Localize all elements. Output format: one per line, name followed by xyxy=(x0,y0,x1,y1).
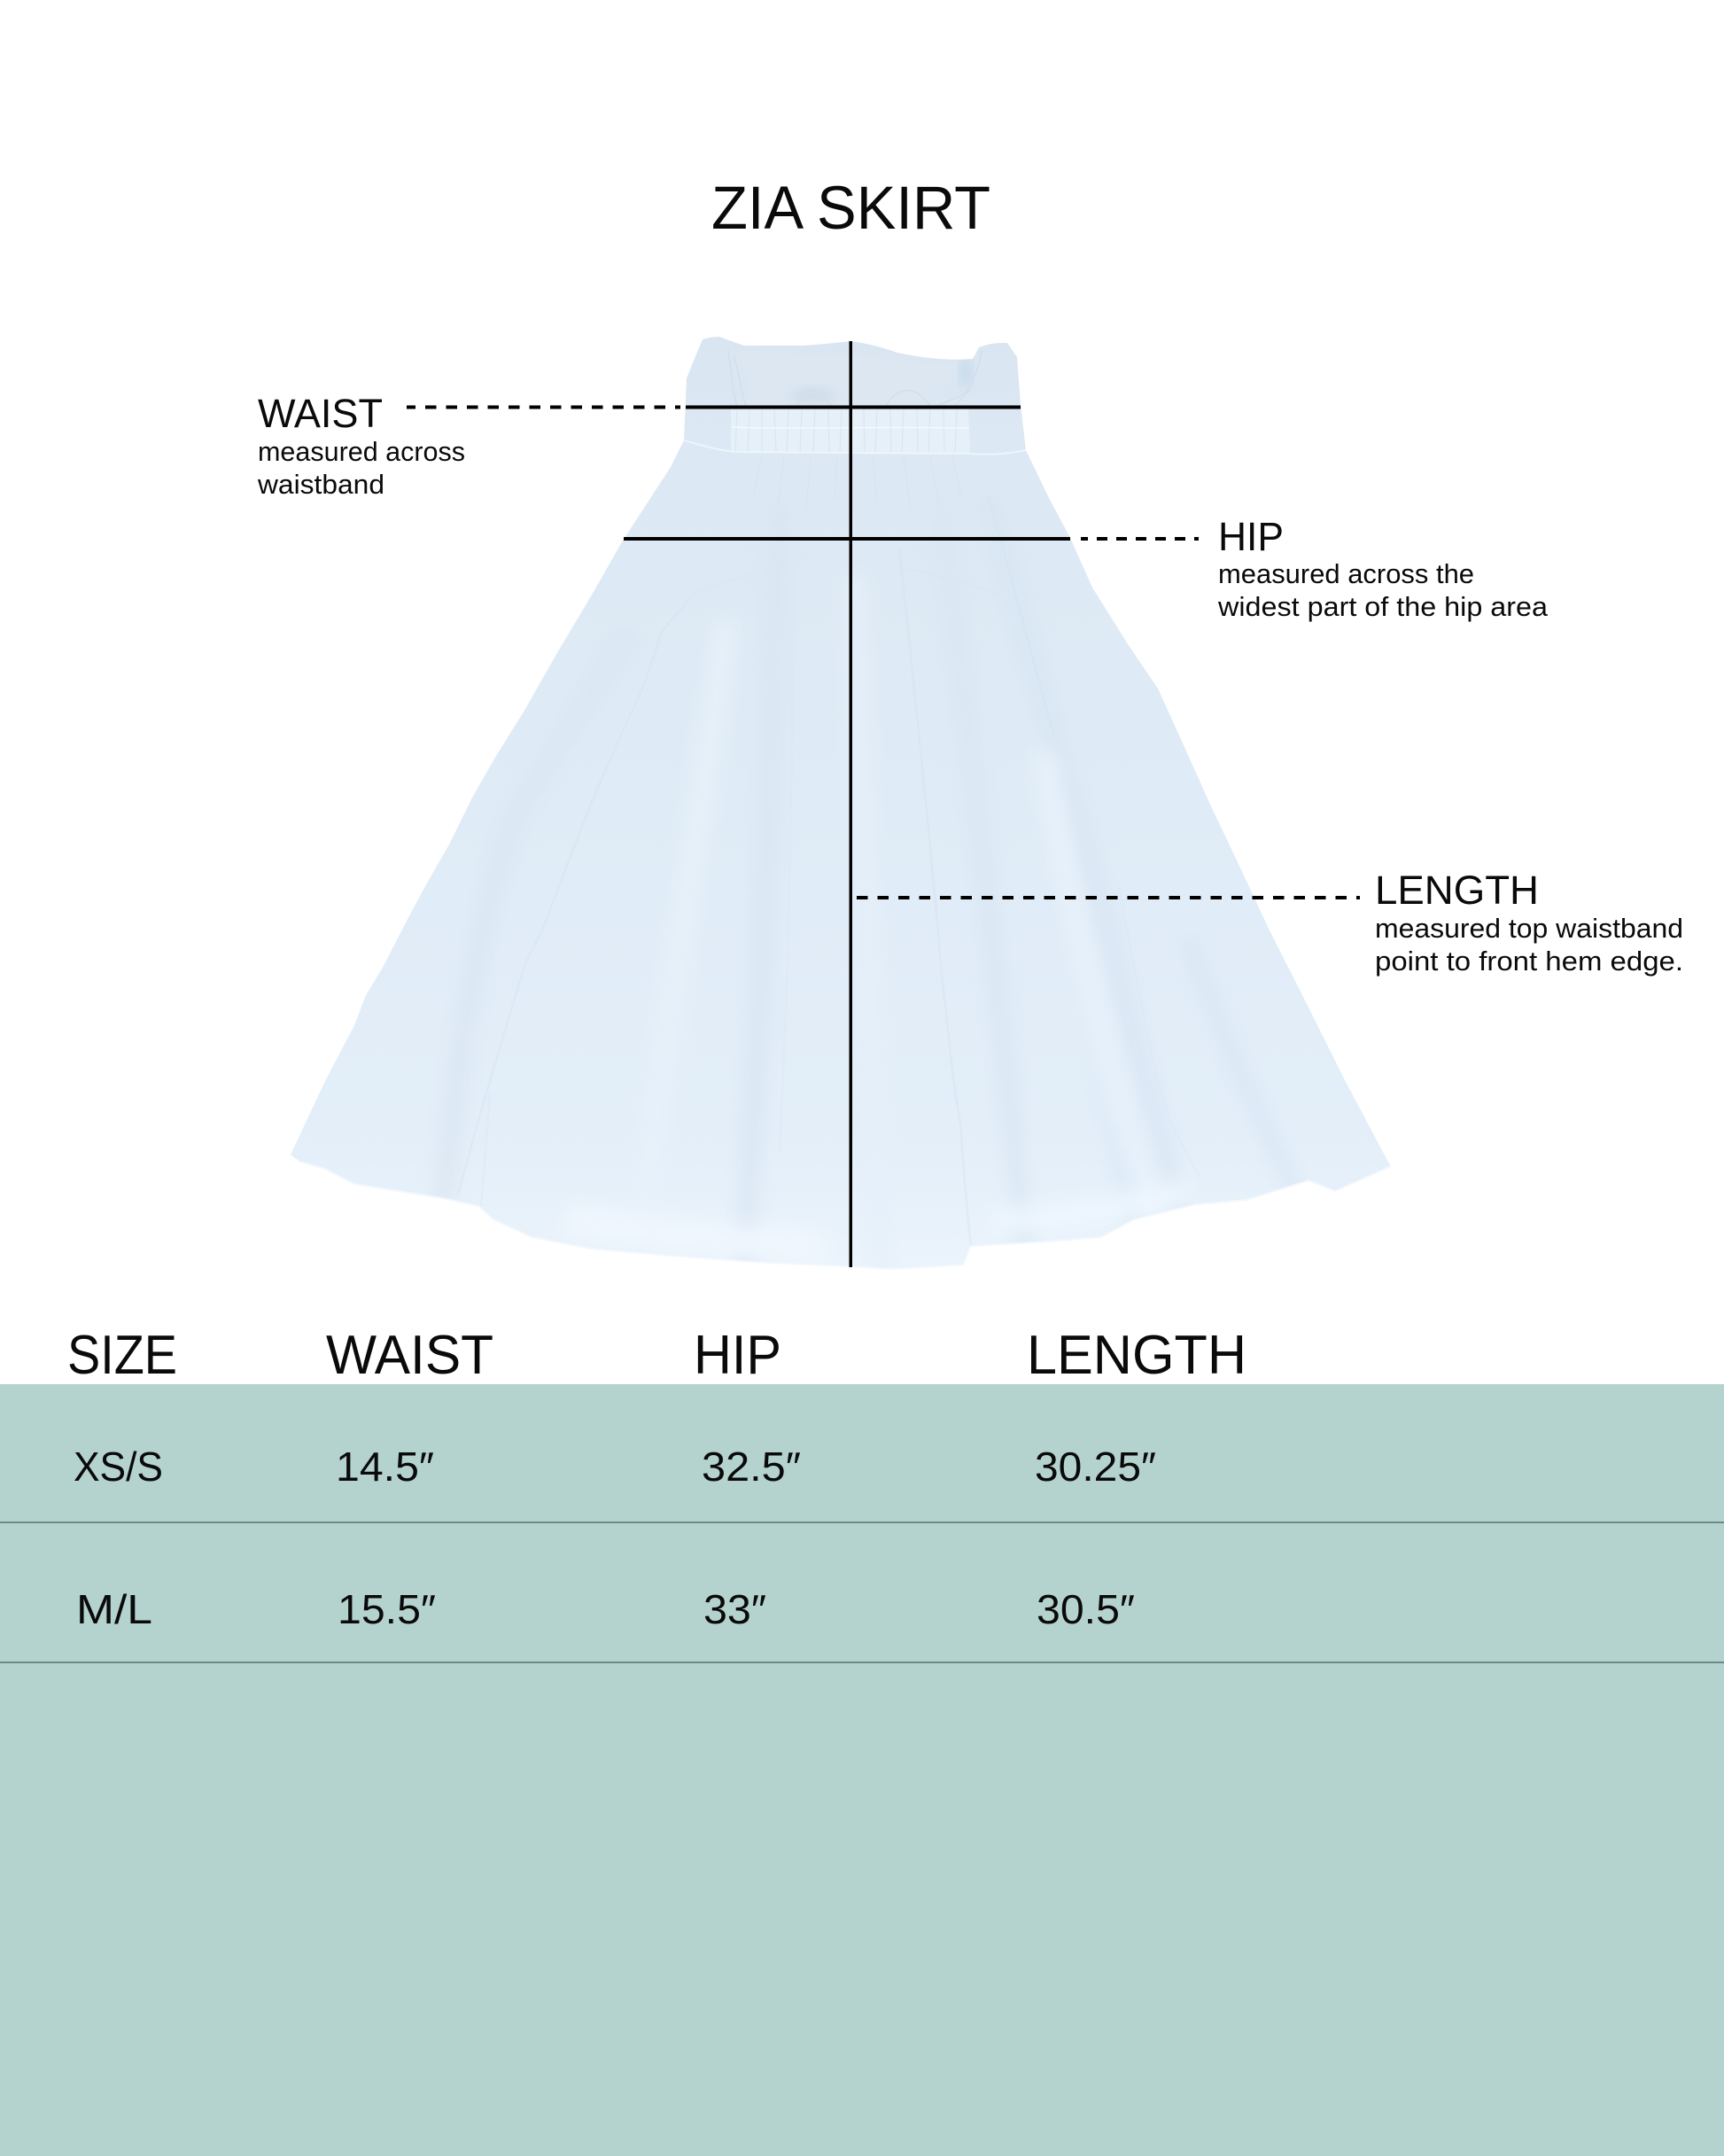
length label: LENGTH xyxy=(1375,868,1539,913)
seams and pleats xyxy=(945,1008,971,1246)
row: M/L: 33″ xyxy=(703,1586,766,1632)
hip label: HIP xyxy=(1218,514,1284,559)
row: XS/S: 30.25″ xyxy=(1035,1444,1156,1490)
row divider XS/S xyxy=(0,1522,1724,1523)
table header: WAIST xyxy=(326,1325,493,1386)
hip line xyxy=(624,537,1070,541)
row divider M/L xyxy=(0,1662,1724,1663)
row: XS/S xyxy=(74,1444,1156,1490)
measurement lines xyxy=(624,341,1070,1267)
hip label xyxy=(1217,514,1549,622)
length line xyxy=(849,341,852,1267)
hip label: widest part of the hip area xyxy=(1217,591,1549,622)
length label: measured top waistband xyxy=(1375,913,1683,944)
waist line xyxy=(686,406,1021,409)
waist label: WAIST xyxy=(258,391,383,436)
waist dashed leader xyxy=(407,406,680,409)
hip dashed leader xyxy=(1081,537,1199,541)
row: XS/S: 32.5″ xyxy=(702,1444,801,1490)
row: M/L xyxy=(76,1586,1135,1632)
waist label: waistband xyxy=(257,469,384,500)
table header xyxy=(67,1325,1246,1386)
table panel xyxy=(0,1384,1724,2156)
skirt illustration xyxy=(291,337,1391,1276)
length label xyxy=(1375,868,1683,977)
waist label xyxy=(257,391,465,500)
row: M/L: 30.5″ xyxy=(1037,1586,1135,1632)
table header: SIZE xyxy=(67,1325,177,1386)
waist label: measured across xyxy=(258,436,465,467)
table header: LENGTH xyxy=(1027,1325,1246,1386)
title: ZIA SKIRT xyxy=(711,174,990,242)
row: M/L: M/L xyxy=(76,1586,152,1632)
table header: HIP xyxy=(694,1325,781,1386)
row: M/L: 15.5″ xyxy=(338,1586,436,1632)
hip label: measured across the xyxy=(1218,558,1474,589)
row: XS/S: XS/S xyxy=(74,1444,163,1490)
waistband gathers xyxy=(684,350,1026,455)
length dashed leader xyxy=(857,896,1360,899)
row: XS/S: 14.5″ xyxy=(336,1444,434,1490)
length label: point to front hem edge. xyxy=(1375,946,1683,977)
